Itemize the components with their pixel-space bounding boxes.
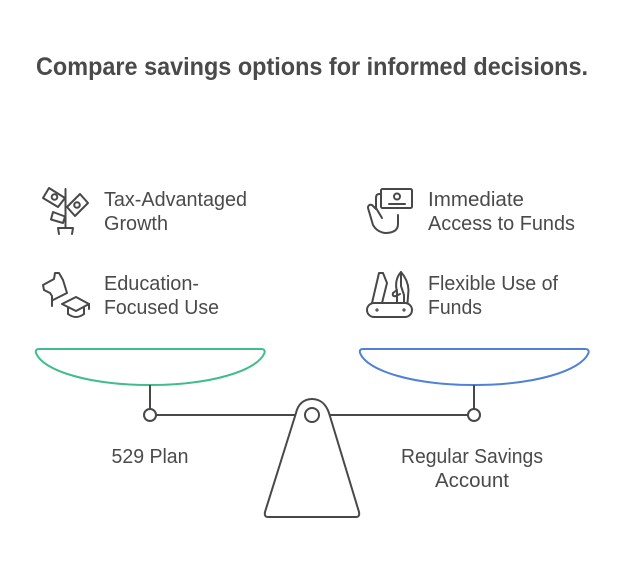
icon: pocket knife xyxy=(367,272,412,317)
label: regular savings account: Account xyxy=(435,470,509,492)
text: immediate access to funds: Access to Funds xyxy=(428,213,575,235)
left pan: 529 plan xyxy=(36,349,265,385)
label: regular savings account: Regular Savings xyxy=(401,446,543,468)
text: flexible use of funds: Funds xyxy=(428,297,482,319)
text: tax-advantaged growth: Growth xyxy=(104,213,168,235)
title: Compare savings options for informed decisions. xyxy=(36,53,588,81)
icon: money plant xyxy=(43,188,88,234)
label: 529 plan: 529 Plan xyxy=(112,446,188,468)
text: flexible use of funds: Flexible Use of xyxy=(428,273,558,295)
text: tax-advantaged growth: Tax-Advantaged xyxy=(104,189,247,211)
text: education-focused use: Education- xyxy=(104,273,199,295)
icon: bust and graduation cap xyxy=(43,273,89,317)
text: education-focused use: Focused Use xyxy=(104,297,219,319)
right pan: regular savings account xyxy=(360,349,589,385)
balance scale xyxy=(144,385,480,517)
icon: hand holding card xyxy=(368,189,412,233)
text: immediate access to funds: Immediate xyxy=(428,189,524,211)
